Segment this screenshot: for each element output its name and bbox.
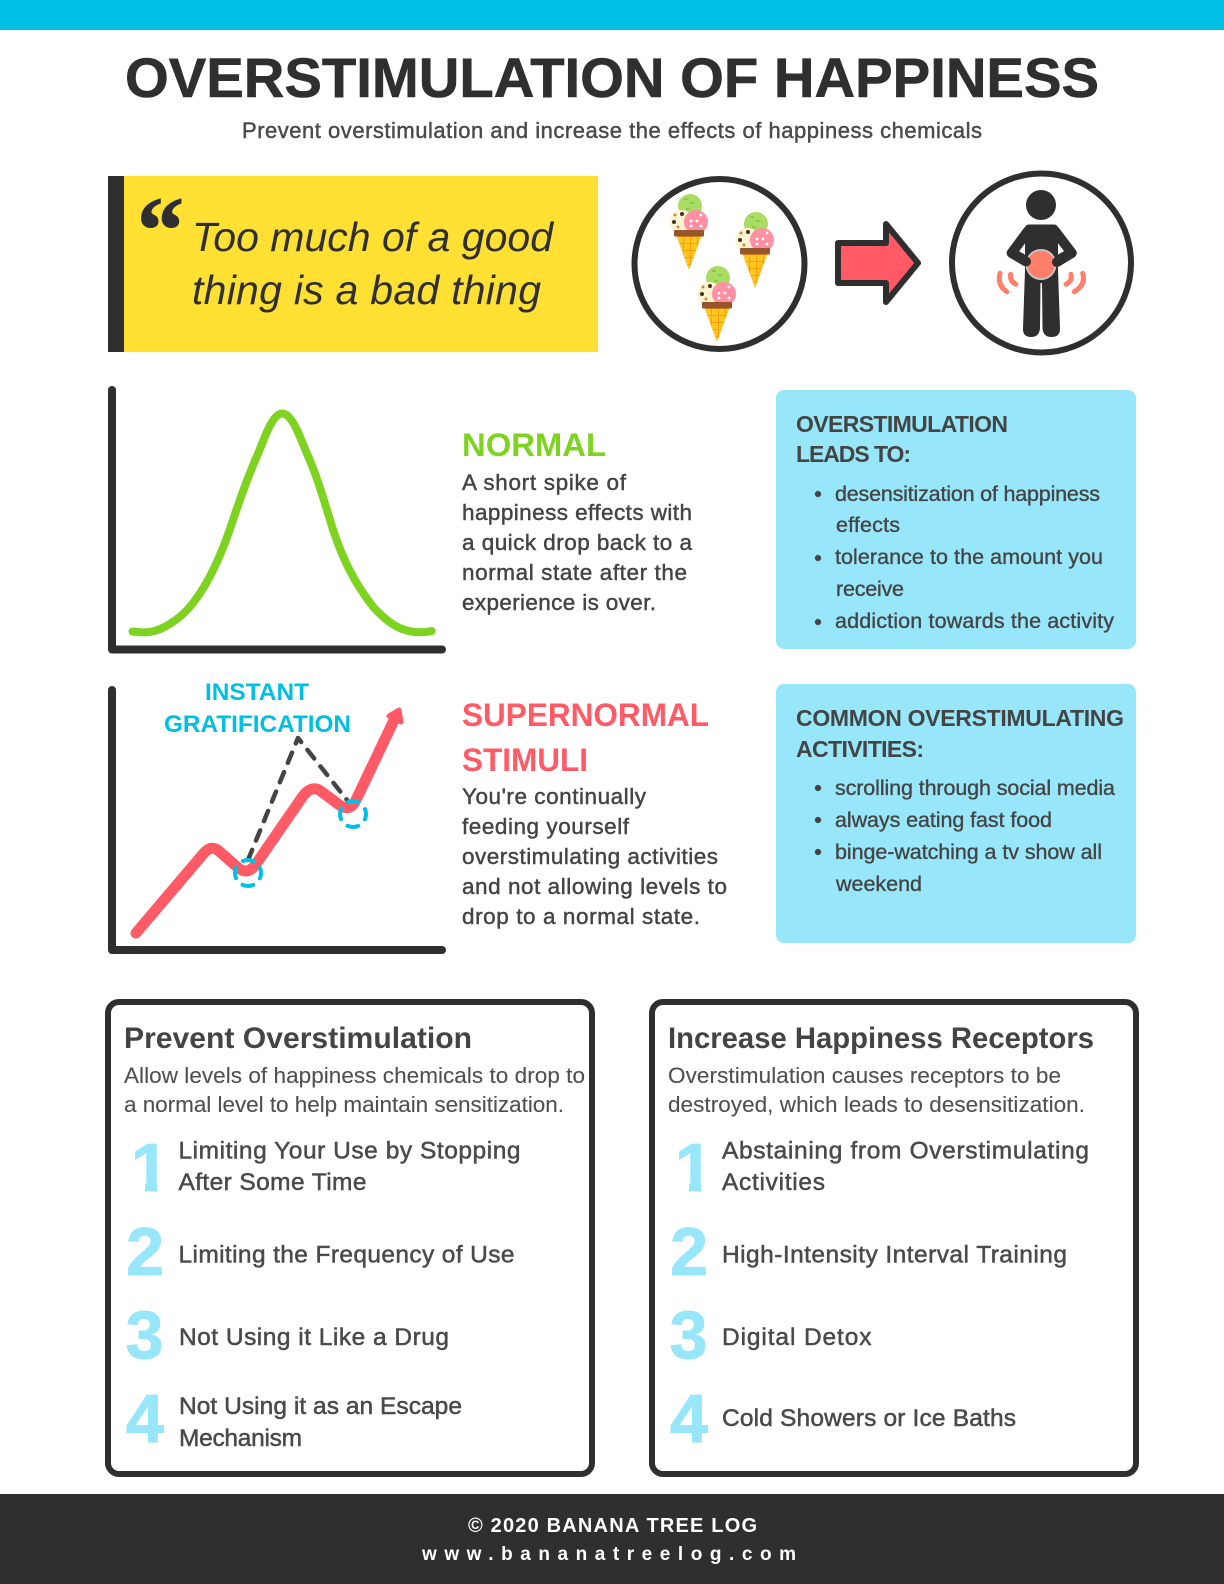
supernormal description: overstimulating activities <box>462 844 718 869</box>
item 2: 2 <box>126 1214 164 1290</box>
normal description: happiness effects with <box>462 500 692 525</box>
normal description <box>462 470 692 615</box>
normal description: a quick drop back to a <box>462 530 692 555</box>
item 2: 2 <box>670 1214 708 1290</box>
item 1 <box>679 1140 1088 1192</box>
supernormal description: drop to a normal state. <box>462 904 700 929</box>
instant gratification label <box>164 679 351 738</box>
item 2: High-Intensity Interval Training <box>722 1242 1067 1268</box>
title: OVERSTIMULATION OF HAPPINESS <box>125 46 1099 109</box>
supernormal heading <box>462 697 709 778</box>
item 3: Not Using it Like a Drug <box>179 1324 449 1351</box>
item 2: Limiting the Frequency of Use <box>178 1242 514 1268</box>
item 2 <box>670 1214 1067 1290</box>
supernormal description: feeding yourself <box>462 814 630 839</box>
item 4 <box>670 1381 1016 1457</box>
panel: prevent overstimulation <box>108 1002 592 1474</box>
bullet list: addiction towards the activity <box>835 609 1114 633</box>
panel heading: COMMON OVERSTIMULATING <box>796 705 1124 731</box>
supernormal heading: STIMULI <box>462 742 588 778</box>
item 3: 3 <box>670 1297 707 1373</box>
arrow <box>838 224 918 302</box>
footer <box>0 1494 1224 1584</box>
panel heading: ACTIVITIES: <box>796 736 924 762</box>
panel: overstimulation leads to <box>776 390 1136 649</box>
bullet list: always eating fast food <box>835 808 1052 832</box>
panel heading <box>796 411 1008 467</box>
bullet list: effects <box>836 513 900 537</box>
instant gratification label: INSTANT <box>205 679 309 706</box>
item 3: 3 <box>126 1297 163 1373</box>
item 4: Cold Showers or Ice Baths <box>722 1405 1016 1432</box>
panel heading: Increase Happiness Receptors <box>668 1022 1094 1055</box>
supernormal description: You're continually <box>462 784 647 809</box>
panel description: Overstimulation causes receptors to be <box>668 1063 1061 1088</box>
normal description: A short spike of <box>462 470 627 495</box>
item 4: 4 <box>670 1381 708 1457</box>
item 1: After Some Time <box>178 1169 366 1196</box>
bullet list: scrolling through social media <box>835 776 1115 800</box>
chart: normal bell curve <box>112 390 442 650</box>
item 4: Not Using it as an Escape <box>179 1393 462 1420</box>
panel description <box>124 1063 585 1117</box>
normal description: normal state after the <box>462 560 687 585</box>
panel heading: LEADS TO: <box>796 441 911 467</box>
subtitle: Prevent overstimulation and increase the effects of happiness chemicals <box>242 118 982 143</box>
footer url: www.bananatreelog.com <box>421 1544 796 1565</box>
top bar <box>0 0 1224 30</box>
item 3 <box>670 1297 872 1373</box>
panel description: Allow levels of happiness chemicals to drop to <box>124 1063 585 1088</box>
bullet list <box>815 776 1115 896</box>
item 2 <box>126 1214 514 1290</box>
bullet list: receive <box>836 577 904 601</box>
item 1: Activities <box>722 1169 825 1196</box>
icon: person with stomach ache <box>952 174 1131 352</box>
bullet list: binge-watching a tv show all <box>835 840 1102 864</box>
item 4 <box>126 1381 462 1457</box>
supernormal heading: SUPERNORMAL <box>462 697 709 733</box>
item 1: Limiting Your Use by Stopping <box>178 1138 520 1164</box>
bullet list <box>815 482 1114 633</box>
bullet list: weekend <box>835 872 922 896</box>
bullet list: tolerance to the amount you <box>835 545 1103 569</box>
item 1: Abstaining from Overstimulating <box>722 1138 1089 1164</box>
quote mark: “ <box>137 179 184 283</box>
icon: ice creams in circle <box>634 179 804 349</box>
panel heading: Prevent Overstimulation <box>124 1022 472 1055</box>
dashed expected line <box>248 738 347 860</box>
chart: supernormal stimuli <box>112 679 442 950</box>
icon: ice cream 2 <box>736 212 774 288</box>
bullet list: desensitization of happiness <box>835 482 1100 506</box>
item 4: 4 <box>126 1381 164 1457</box>
item 4: Mechanism <box>179 1425 302 1452</box>
item 3: Digital Detox <box>722 1324 872 1351</box>
panel heading: OVERSTIMULATION <box>796 411 1008 437</box>
quote text: thing is a bad thing <box>192 267 541 313</box>
panel: common overstimulating activities <box>776 684 1136 943</box>
item 3 <box>126 1297 449 1373</box>
panel heading <box>796 705 1124 762</box>
item 1: 1 <box>131 1130 169 1206</box>
panel description: a normal level to help maintain sensitization. <box>124 1092 564 1117</box>
icon: ice cream 1 <box>670 194 708 270</box>
supernormal description: and not allowing levels to <box>462 874 727 899</box>
supernormal description <box>462 784 727 929</box>
normal heading: NORMAL <box>462 427 606 463</box>
item 1 <box>135 1140 520 1192</box>
quote text: Too much of a good <box>192 214 554 260</box>
icon: ice cream 3 <box>698 266 736 342</box>
panel description <box>668 1063 1085 1117</box>
panel: increase happiness receptors <box>652 1002 1136 1474</box>
instant gratification label: GRATIFICATION <box>164 711 351 738</box>
arrow head <box>389 710 401 722</box>
item 1: 1 <box>675 1130 713 1206</box>
footer copyright: © 2020 BANANA TREE LOG <box>468 1515 757 1537</box>
quote text <box>192 214 554 313</box>
red rising line <box>136 716 396 933</box>
panel description: destroyed, which leads to desensitization. <box>668 1092 1085 1117</box>
blue dashed circles <box>235 801 366 886</box>
normal description: experience is over. <box>462 590 656 615</box>
panel: quote <box>108 176 598 352</box>
